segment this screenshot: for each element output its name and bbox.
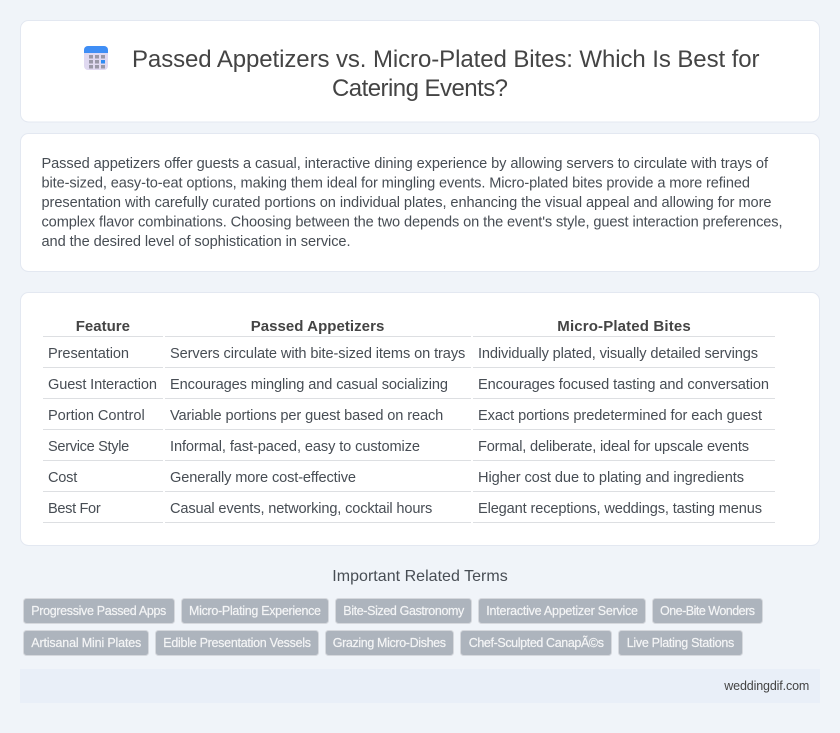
tag	[156, 630, 318, 656]
table header row: Feature	[76, 318, 130, 335]
text block: description: complex flavor combinations. Choosing between the two depends on the event's style, guest interaction preferences,	[42, 214, 782, 230]
tag	[618, 630, 742, 656]
icon: calendar	[84, 46, 108, 70]
tag: Interactive Appetizer Service	[486, 604, 638, 618]
table row: Guest Interaction: Encourages mingling and casual socializing	[170, 377, 448, 393]
footer: weddingdif.com	[723, 679, 809, 693]
panel: title header	[20, 20, 820, 122]
panel: description	[20, 134, 820, 272]
table row: Best For: Elegant receptions, weddings, tasting menus	[478, 501, 762, 517]
tag: Chef-Sculpted CanapÃ©s	[469, 636, 604, 650]
table row: Portion Control	[48, 408, 762, 424]
tag	[182, 598, 328, 624]
table row: Cost: Higher cost due to plating and ingredients	[478, 470, 744, 486]
tag	[478, 598, 646, 624]
panel: comparison table	[20, 292, 820, 546]
table row: Presentation: Presentation	[48, 346, 129, 362]
table row: Presentation: Servers circulate with bite-sized items on trays	[170, 346, 465, 362]
table row: Portion Control: Portion Control	[48, 408, 145, 424]
table row: Service Style: Formal, deliberate, ideal for upscale events	[478, 439, 749, 455]
table row: Portion Control: Exact portions predetermined for each guest	[478, 408, 762, 424]
table header row: Passed Appetizers	[251, 318, 384, 335]
table row: Service Style: Informal, fast-paced, easy to customize	[170, 439, 420, 455]
tag: Edible Presentation Vessels	[163, 636, 311, 650]
title: Passed Appetizers vs. Micro-Plated Bites: Which Is Best for	[132, 46, 760, 73]
table row: Cost	[48, 470, 744, 486]
tag: Live Plating Stations	[627, 636, 734, 650]
table row: Guest Interaction: Encourages focused tasting and conversation	[478, 377, 769, 393]
title	[132, 46, 760, 102]
text block: description: bite-sized, easy-to-eat options, making them ideal for mingling events. Micro-plated bites provide a more refined	[42, 175, 750, 191]
table row: Guest Interaction	[48, 377, 769, 393]
tag	[24, 630, 148, 656]
tag	[652, 598, 762, 624]
text block: description: presentation with carefully curated portions on individual plates, enhancing the visual appeal and allowing for more	[42, 195, 772, 211]
table row: Cost: Cost	[48, 470, 77, 486]
tag: Progressive Passed Apps	[31, 604, 166, 618]
related terms tags	[24, 598, 762, 656]
table row: Service Style: Service Style	[48, 439, 129, 455]
table row: Portion Control: Variable portions per guest based on reach	[170, 408, 443, 424]
table row: Best For	[48, 501, 762, 517]
tag	[326, 630, 454, 656]
text block: description: and the desired level of sophistication in service.	[42, 234, 350, 250]
tag: Artisanal Mini Plates	[31, 636, 141, 650]
table header row: Micro-Plated Bites	[557, 318, 691, 335]
title: Catering Events?	[332, 75, 508, 102]
table row: Presentation	[48, 346, 758, 362]
table row: Service Style	[48, 439, 749, 455]
tag: Grazing Micro-Dishes	[333, 636, 446, 650]
table row: Guest Interaction: Guest Interaction	[48, 377, 157, 393]
tag	[24, 598, 174, 624]
text block: description: Passed appetizers offer guests a casual, interactive dining experience by allowing servers to circulate with trays of	[42, 156, 769, 172]
table row: Cost: Generally more cost-effective	[170, 470, 356, 486]
footer	[20, 669, 820, 703]
text block: description	[42, 156, 782, 250]
tag	[336, 598, 472, 624]
table row: Presentation: Individually plated, visually detailed servings	[478, 346, 758, 362]
table row: Best For: Best For	[48, 501, 101, 517]
heading: related terms: Important Related Terms	[332, 568, 508, 585]
tag: Micro-Plating Experience	[189, 604, 321, 618]
tag: Bite-Sized Gastronomy	[343, 604, 465, 618]
tag	[460, 630, 612, 656]
tag: One-Bite Wonders	[660, 604, 755, 618]
table header row	[76, 318, 691, 335]
table row: Best For: Casual events, networking, cocktail hours	[170, 501, 432, 517]
